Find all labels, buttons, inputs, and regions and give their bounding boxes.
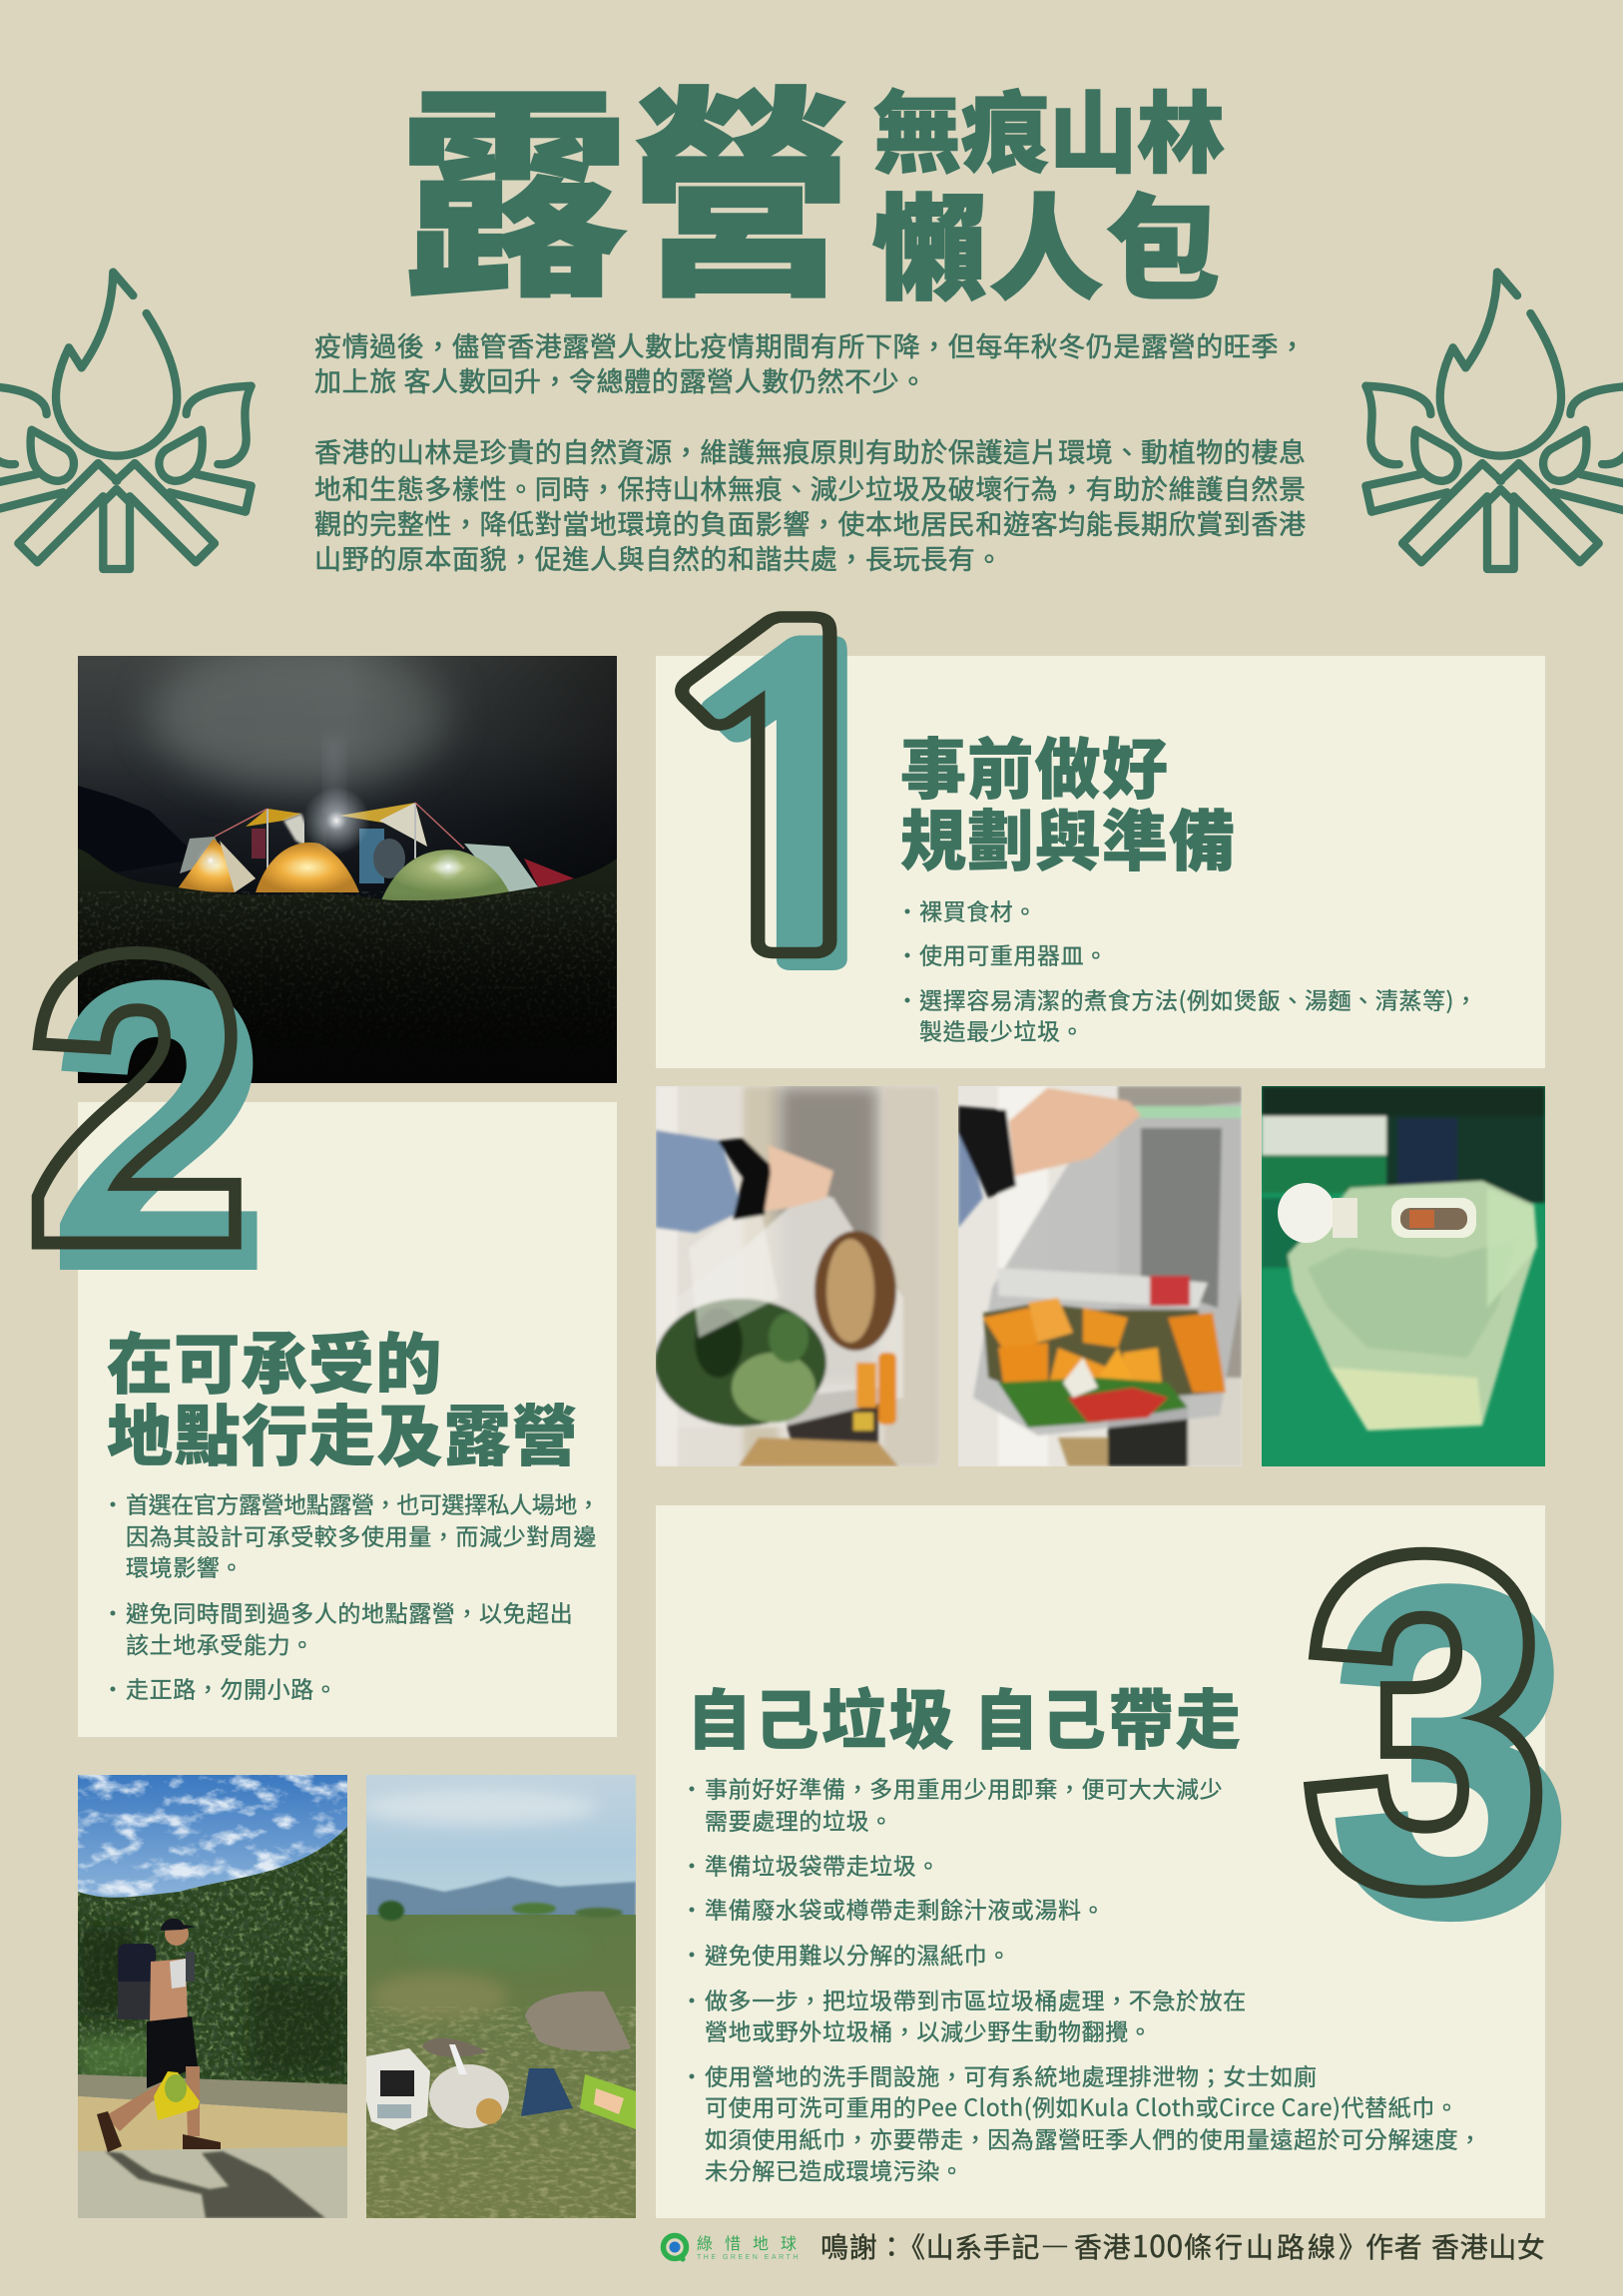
bullet list: step 1	[904, 892, 1478, 1046]
photo: food scraps and bread in bags	[656, 1086, 939, 1466]
intro text: 香港的山林是珍貴的自然資源，維護無痕原則有助於保護這片環境、動植物的棲息	[314, 431, 1307, 470]
logo wordmark: 綠惜地球	[697, 2230, 809, 2254]
footer: credit: 鳴謝：	[820, 2226, 906, 2266]
bullet list: step 2: 因為其設計可承受較多使用量，而減少對周邊	[126, 1517, 597, 1551]
footer: credit: 香港山女	[1431, 2226, 1545, 2266]
white bag	[429, 2064, 509, 2128]
title	[399, 18, 1225, 340]
logo wordmark: THE GREEN EARTH	[697, 2254, 801, 2261]
intro text: 觀的完整性，降低對當地環境的負面影響，使本地居民和遊客均能長期欣賞到香港	[314, 503, 1307, 542]
footer: credit: 作者	[1365, 2226, 1422, 2266]
numeral 2	[32, 946, 258, 1270]
green dome	[381, 850, 513, 900]
bullet list: step 2: 該土地承受能力。	[126, 1626, 314, 1660]
navy bag	[521, 2068, 573, 2116]
heading: step 2	[107, 1312, 579, 1479]
bullet list: step 3: 準備廢水袋或樽帶走剩餘汁液或湯料。	[705, 1891, 1105, 1925]
dark hedge	[78, 849, 617, 1083]
title: main characters	[399, 18, 852, 340]
bullet list: step 2: 首選在官方露營地點露營，也可選擇私人場地，	[126, 1485, 600, 1519]
bullet list: step 1: 裸買食材。	[919, 892, 1037, 926]
trees	[78, 1827, 347, 2086]
bullet list: step 3: 事前好好準備，多用重用少用即棄，便可大大減少	[705, 1771, 1223, 1805]
bullet list: step 1: 選擇容易清潔的煮食方法(例如煲飯、湯麵、清蒸等)，	[919, 982, 1478, 1016]
person	[97, 1919, 221, 2152]
footer: logo	[663, 2230, 809, 2262]
panel: step 2 background	[78, 1102, 617, 1737]
title: subtitle: 懶人包	[872, 158, 1223, 322]
bullet list: step 2: 環境影響。	[126, 1549, 244, 1583]
heading: step 2: 在可承受的	[107, 1312, 443, 1408]
numeral 1: 1	[640, 606, 960, 1027]
intro text	[314, 325, 1307, 577]
numeral 3	[1304, 1547, 1561, 1923]
heading: step 3: 自己垃圾 自己帶走	[687, 1668, 1243, 1762]
orange tent	[176, 839, 256, 892]
footer: credit: 香港	[1074, 2226, 1131, 2266]
title: main characters: 露	[399, 19, 628, 339]
intro text: 地和生態多樣性。同時，保持山林無痕、減少垃圾及破壞行為，有助於維護自然景	[314, 468, 1307, 507]
bullet list: step 3: 營地或野外垃圾桶，以減少野生動物翻攪。	[705, 2012, 1152, 2046]
yellow dome	[256, 843, 359, 892]
title: main characters: 營	[630, 18, 852, 340]
intro text: 加上旅 客人數回升，令總體的露營人數仍然不少。	[314, 360, 927, 399]
footer: credit: 《山系手記	[897, 2226, 1040, 2266]
icon: campfire right	[1365, 273, 1623, 569]
heading: step 1: 規劃與準備	[900, 789, 1236, 884]
numeral 3: 3	[1333, 1496, 1570, 2007]
panel: step 3	[656, 1505, 1545, 2218]
photo: tents at night	[78, 656, 617, 1083]
icon: campfire left	[0, 273, 252, 569]
photo: hiker walking with rubbish bag	[78, 1775, 347, 2218]
background tents and people	[180, 837, 225, 873]
white pouch	[366, 2048, 430, 2130]
bullet list: step 1: 使用可重用器皿。	[919, 936, 1108, 970]
footer: credit: 100	[1132, 2222, 1184, 2266]
title: subtitle: 無痕山林	[873, 64, 1225, 191]
bullet list: step 3: 做多一步，把垃圾帶到市區垃圾桶處理，不急於放在	[705, 1983, 1247, 2016]
photo: rubbish packed on grass	[366, 1775, 636, 2218]
bullet list: step 3: 需要處理的垃圾。	[705, 1803, 893, 1837]
title: subtitle	[872, 64, 1225, 322]
rocks	[525, 1992, 631, 2051]
bullet list: step 2: 避免同時間到過多人的地點露營，以免超出	[126, 1595, 573, 1629]
heading: step 1	[900, 717, 1236, 884]
text block: step 2	[107, 1312, 600, 1705]
footer: credit: —	[1041, 2226, 1070, 2266]
snack pack	[580, 2074, 636, 2129]
bullet list: step 3: 未分解已造成環境污染。	[705, 2152, 964, 2186]
photo: chopped vegetables in bag	[958, 1086, 1242, 1466]
bullet list: step 1: 製造最少垃圾。	[919, 1012, 1084, 1046]
numeral 1	[675, 611, 847, 970]
photo: water bag on green floor	[1262, 1086, 1545, 1466]
shadow	[105, 2151, 325, 2218]
bullet list: step 3: 可使用可洗可重用的Pee Cloth(例如Kula Cloth或Circe Care)代替紙巾。	[705, 2088, 1458, 2122]
numeral 2: 2	[54, 906, 266, 1347]
bullet list: step 2	[110, 1485, 600, 1705]
bullet list: step 3: 準備垃圾袋帶走垃圾。	[705, 1847, 940, 1881]
intro text: 山野的原本面貌，促進人與自然的和諧共處，長玩長有。	[314, 538, 1003, 577]
heading: step 2: 地點行走及露營	[107, 1384, 579, 1479]
logo mark	[663, 2236, 687, 2262]
lights	[302, 787, 370, 855]
panel: step 1	[656, 656, 1545, 1068]
bullet list: step 3: 使用營地的洗手間設施，可有系統地處理排泄物；女士如廁	[705, 2058, 1318, 2092]
footer: credit: 條行山路線》	[1184, 2226, 1369, 2266]
bullet list: step 2: 走正路，勿開小路。	[126, 1671, 337, 1705]
bullet list: step 3: 避免使用難以分解的濕紙巾。	[705, 1937, 1011, 1971]
bullet list: step 3	[689, 1771, 1482, 2186]
intro text: 疫情過後，儘管香港露營人數比疫情期間有所下降，但每年秋冬仍是露營的旺季，	[314, 325, 1307, 364]
tarps	[246, 809, 301, 827]
bullet list: step 3: 如須使用紙巾，亦要帶走，因為露營旺季人們的使用量遠超於可分解速度，	[705, 2120, 1482, 2154]
heading: step 1: 事前做好	[900, 717, 1169, 813]
